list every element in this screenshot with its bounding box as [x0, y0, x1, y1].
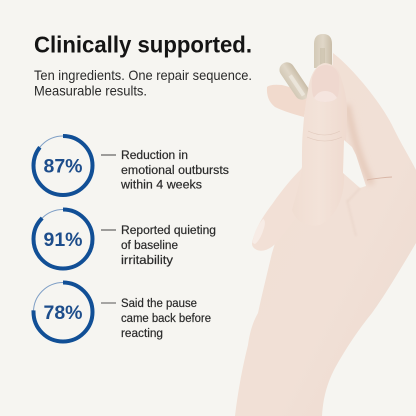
capsule: left — [277, 59, 312, 103]
subtitle — [34, 67, 252, 98]
rear fingers, palm and arm — [235, 53, 416, 416]
label — [120, 148, 229, 192]
finger crease — [367, 177, 392, 180]
stat: 78% pause came back — [34, 282, 211, 342]
capsule: rear — [314, 34, 332, 68]
gap between fingers — [343, 140, 366, 188]
finger shading — [347, 105, 372, 184]
title: Clinically supported. — [34, 32, 252, 58]
thumb nail moon — [314, 91, 337, 102]
thumb fold — [347, 188, 360, 236]
connector line — [101, 230, 116, 231]
label: emotional outbursts — [121, 163, 229, 177]
ring: 87% — [34, 136, 92, 195]
label — [121, 223, 216, 267]
stat: 87% reduction in outbursts — [34, 136, 229, 195]
hand holding capsules — [235, 34, 416, 416]
knuckle crease — [307, 131, 342, 141]
ring: 91% — [34, 210, 92, 268]
label: irritability — [121, 253, 174, 267]
thumb nail — [312, 65, 339, 102]
index fingertip — [267, 85, 308, 117]
label: of baseline — [121, 238, 178, 252]
label — [121, 296, 211, 340]
value: 87%: 87% — [43, 156, 83, 178]
subtitle: Ten ingredients. One repair sequence. — [34, 67, 252, 83]
label: reacting — [121, 326, 163, 340]
connector line — [101, 302, 116, 304]
stat: 91% reported quieting — [34, 210, 216, 268]
label: Said the pause — [121, 296, 197, 310]
subtitle: Measurable results. — [34, 82, 147, 98]
lower fingertip with nail — [252, 168, 306, 251]
label: came back before — [121, 311, 211, 325]
label: within 4 weeks — [120, 178, 202, 192]
ring: 78% — [34, 282, 92, 342]
value: 91%: 91% — [43, 229, 83, 251]
thumb — [292, 63, 347, 226]
label: Reported quieting — [121, 223, 216, 237]
connector line — [101, 154, 116, 156]
label: Reduction in — [121, 148, 188, 162]
value: 78%: 78% — [43, 302, 83, 324]
